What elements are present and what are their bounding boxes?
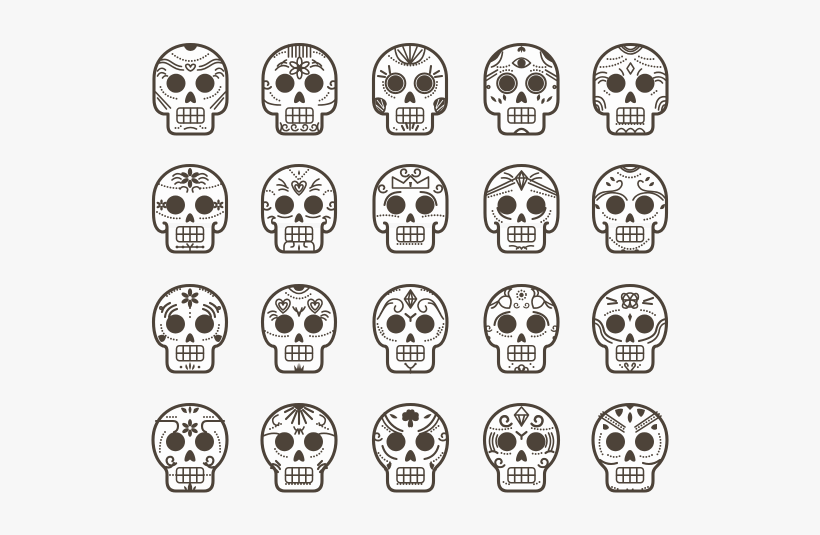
skull 5	[594, 44, 667, 134]
decoration: arcs and diamond	[616, 45, 644, 132]
decoration: drops and chevrons	[625, 405, 635, 492]
decoration: heart and scrolls	[288, 168, 310, 251]
skull 1	[154, 44, 227, 134]
skull 2	[263, 44, 336, 134]
decoration: hearts and arch	[286, 286, 312, 373]
decoration: clover and bands	[398, 409, 424, 484]
decoration: crown	[392, 176, 428, 244]
skull 4	[485, 44, 558, 134]
skull 6	[154, 166, 226, 252]
skull 13	[374, 286, 447, 373]
skull 17	[262, 404, 336, 491]
skull 16	[153, 404, 227, 491]
skull 11	[154, 286, 226, 372]
decoration: vines and drops	[610, 167, 650, 249]
skull 3	[374, 44, 446, 134]
decoration: flower and leaves	[181, 288, 199, 370]
skull 10	[594, 166, 666, 252]
skull 19	[484, 404, 558, 491]
skull 14	[485, 286, 558, 372]
decoration: third eye and chevrons	[512, 46, 530, 133]
skull 9	[485, 166, 558, 252]
skull 15	[594, 286, 666, 372]
skull 12	[262, 286, 336, 373]
skull 20	[593, 404, 667, 492]
decoration: clover and bands	[622, 293, 638, 372]
decoration: diamond and scrolls	[404, 290, 417, 373]
skull 8	[374, 166, 447, 252]
decoration: flower and band	[178, 168, 202, 251]
decoration: petals and hooks	[181, 406, 199, 491]
skull 7	[262, 166, 336, 252]
decoration: comb and flower	[288, 45, 310, 79]
decoration: diamond and scrolls	[514, 407, 528, 439]
decoration: corner flowers	[515, 290, 528, 372]
skull 18	[374, 404, 448, 491]
decoration: top dome and heart	[172, 44, 208, 71]
decoration: sunburst and band	[285, 404, 313, 484]
decoration: diamond headband	[510, 171, 534, 249]
decoration: fan and ringed eyes	[389, 45, 431, 66]
